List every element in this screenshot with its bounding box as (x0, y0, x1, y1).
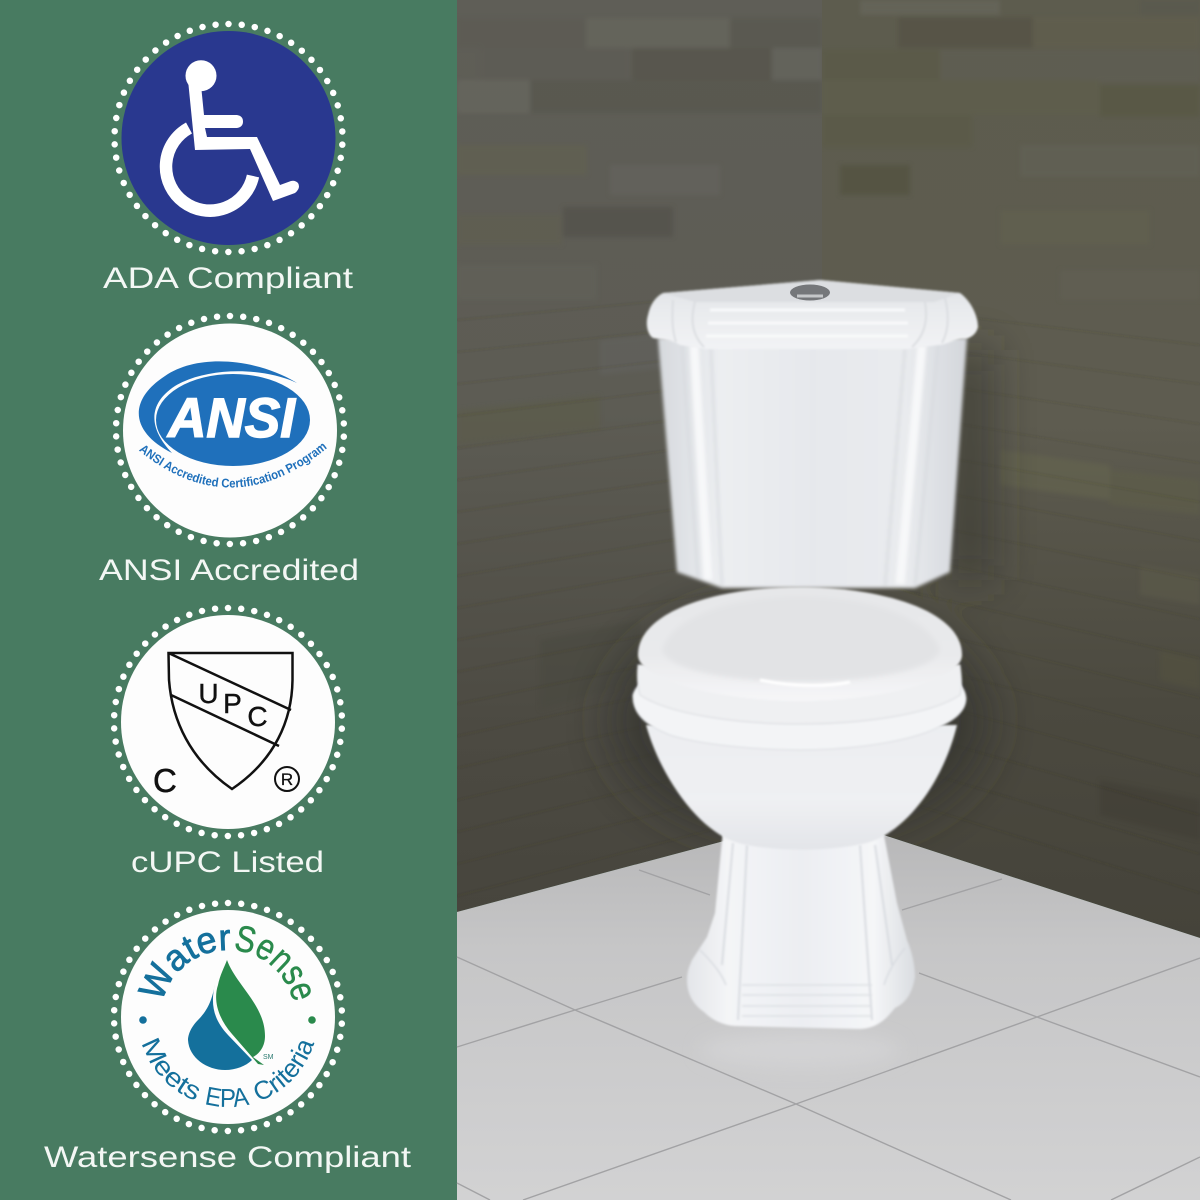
toilet tank lid (647, 280, 978, 349)
toilet rim (633, 680, 966, 750)
icon: UPC shield: C (247, 701, 268, 732)
blue disc (122, 31, 336, 245)
white disc (121, 615, 335, 829)
panel: green certification sidebar (0, 0, 457, 1200)
toilet tank (658, 338, 967, 588)
photo: toilet in tiled corner (457, 0, 1200, 1200)
label: cUPC Listed: cUPC Listed (131, 846, 324, 879)
icon: ANSI logo: ANSI (166, 386, 296, 449)
icon: UPC shield: R (281, 770, 293, 789)
dotted ring: cUPC (114, 608, 342, 836)
label: ADA Compliant: ADA Compliant (103, 262, 354, 295)
toilet seat band (637, 665, 962, 724)
toilet cast shadow (610, 350, 990, 840)
toilet bowl (646, 725, 957, 850)
icon: wheelchair symbol (166, 60, 299, 211)
badge: ANSI accredited (99, 312, 359, 587)
badge: ADA compliant (103, 24, 354, 295)
icon: ANSI logo: ANSI Accredited Certification Program (139, 444, 327, 488)
dotted ring: WaterSense (114, 903, 342, 1131)
icon: ANSI logo (138, 361, 327, 488)
icon: WaterSense logo: Water (137, 930, 230, 996)
icon: WaterSense logo: Sense (236, 926, 311, 1000)
toilet pedestal (687, 830, 915, 1029)
dotted ring: ADA (114, 24, 342, 252)
right wall (822, 0, 1200, 938)
badge: cUPC listed (114, 608, 342, 879)
icon: UPC shield (153, 653, 299, 799)
icon: flush button (790, 284, 830, 300)
tile floor (457, 815, 1200, 1200)
icon: UPC shield: C (153, 762, 177, 799)
white disc (121, 910, 335, 1124)
icon: UPC shield: U (198, 678, 219, 709)
icon: WaterSense logo: EPA (206, 1086, 250, 1108)
icon: WaterSense logo (137, 926, 316, 1108)
toilet lid (638, 587, 962, 701)
dotted ring: ANSI (116, 316, 344, 544)
toilet (633, 280, 978, 1029)
icon: WaterSense logo: Criteria (254, 1041, 314, 1099)
icon: WaterSense logo: Meets (142, 1038, 199, 1100)
label: Watersense Compliant: Watersense Compliant (44, 1141, 412, 1174)
icon: WaterSense logo: SM (263, 1054, 274, 1061)
badge: WaterSense compliant (44, 900, 412, 1174)
label: ANSI Accredited: ANSI Accredited (99, 554, 359, 587)
wall corner shading (821, 0, 823, 815)
white disc (123, 324, 337, 538)
icon: UPC shield: P (223, 688, 242, 719)
left wall (457, 0, 822, 912)
